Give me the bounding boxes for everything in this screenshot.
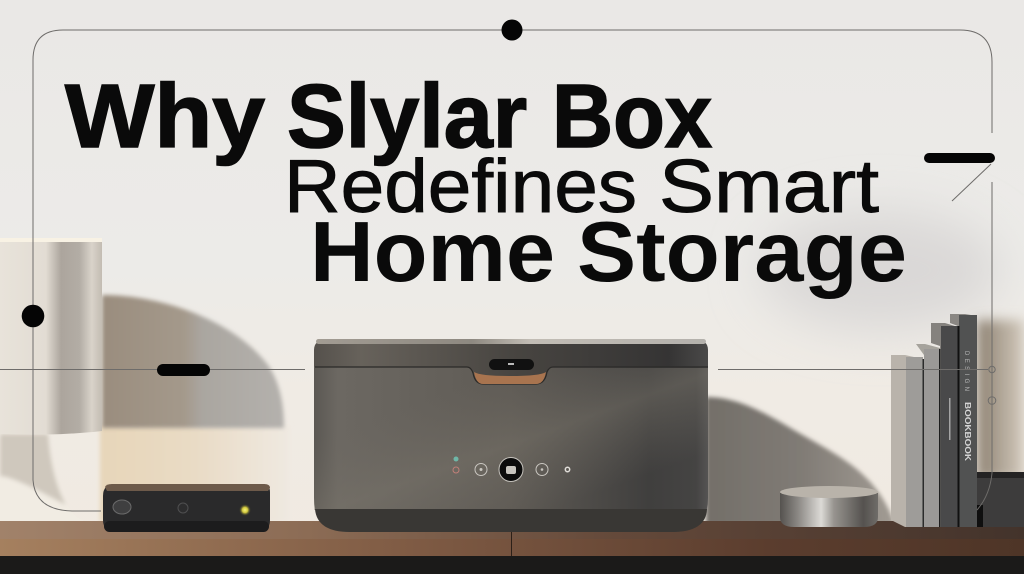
title line 2: Smart bbox=[659, 144, 879, 228]
lid bbox=[314, 340, 708, 384]
dot: left bbox=[22, 305, 44, 327]
body highlight bbox=[314, 368, 708, 510]
book 1 bbox=[891, 355, 923, 527]
box body bbox=[314, 366, 708, 532]
lid seam bbox=[315, 367, 708, 384]
title line 2: Redefines bbox=[284, 144, 637, 228]
dot: top bbox=[502, 20, 522, 40]
lamp shadow on wall bbox=[100, 295, 290, 522]
dark object right of books bbox=[977, 472, 1024, 527]
copper handle bbox=[474, 372, 546, 384]
control panel bbox=[453, 456, 570, 482]
pill: left bbox=[157, 364, 210, 376]
lamp bbox=[0, 238, 102, 528]
title line 3: Storage bbox=[577, 205, 907, 300]
title bbox=[65, 67, 907, 300]
book 4: BOOKBOOK bbox=[963, 402, 972, 461]
metal puck speaker bbox=[780, 486, 878, 527]
storage box bbox=[314, 339, 708, 532]
book 3 bbox=[931, 323, 958, 527]
book 4 bbox=[950, 314, 977, 527]
lid display bbox=[489, 359, 534, 370]
bottom band bbox=[315, 509, 707, 532]
title line 1: Slylar bbox=[287, 67, 527, 167]
small black router device bbox=[103, 484, 270, 532]
title line 3: Home bbox=[310, 205, 555, 300]
right shadow on wall bbox=[706, 397, 895, 525]
shadow on the far right wall bbox=[977, 320, 1024, 480]
title line 1: Why bbox=[65, 67, 265, 167]
stack of books bbox=[891, 314, 1024, 527]
spine text: DESIGN bbox=[963, 351, 969, 391]
pill: top right bbox=[924, 153, 995, 163]
soft grey wall shading right of the title bbox=[760, 210, 1000, 330]
book 2 bbox=[916, 344, 940, 527]
wooden shelf bbox=[0, 521, 1024, 574]
title line 1: Box bbox=[552, 67, 712, 167]
